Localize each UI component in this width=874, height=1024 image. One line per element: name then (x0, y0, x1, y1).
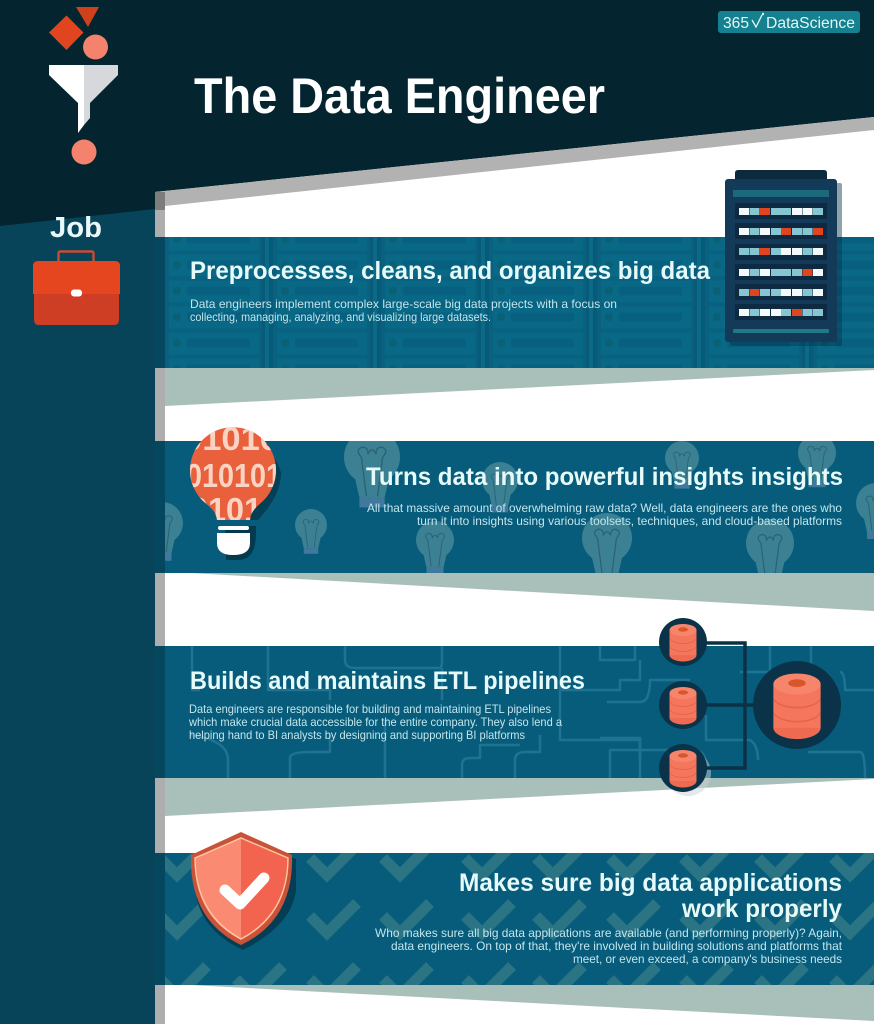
icon: briefcase (33, 252, 120, 325)
icon: light bulb (190, 427, 281, 560)
icon: shield (191, 832, 296, 950)
body: insights: turn it into insights using various toolsets, techniques, and cloud-based platforms (417, 514, 842, 528)
sidebar (0, 200, 155, 1024)
title: The Data Engineer (194, 68, 605, 124)
body: ETL: which make crucial data accessible for the entire company. They also lend a (188, 715, 562, 729)
body: ETL: Data engineers are responsible for building and maintaining ETL pipelines (189, 702, 551, 716)
band 4: check pattern (165, 853, 874, 985)
heading: applications (459, 869, 842, 923)
body: preprocess: Data engineers implement complex large-scale big data projects with a focus on (190, 297, 617, 311)
heading: insights: Turns data into powerful insights insights (366, 463, 843, 491)
band 1 lower sage wedge (165, 368, 874, 406)
heading: ETL: Builds and maintains ETL pipelines (190, 667, 585, 695)
body: preprocess (190, 297, 617, 324)
body: applications: data engineers. On top of that, they're involved in building solutions and platforms that (391, 939, 843, 953)
body: applications: Who makes sure all big data applications are available (and performing properly)? Again, (375, 926, 842, 940)
icon: funnel with shapes (49, 7, 118, 164)
heading: applications: work properly (681, 895, 842, 923)
panel: applications text (375, 869, 843, 966)
body: applications (375, 926, 843, 966)
band 3 lower sage wedge (165, 778, 874, 816)
band 2: bulb pattern (165, 441, 874, 573)
panel: insights text (366, 463, 843, 528)
header grey slanted strip (155, 117, 874, 206)
panel: preprocess text (190, 257, 711, 324)
body: insights (367, 501, 842, 528)
heading: applications: Makes sure big data applications (459, 869, 842, 897)
body: ETL: helping hand to BI analysts by designing and supporting BI platforms (189, 728, 525, 742)
body: preprocess: collecting, managing, analyzing, and visualizing large datasets. (190, 310, 491, 324)
icon: database network (659, 618, 841, 796)
body: ETL (188, 702, 562, 742)
band 2 lower sage wedge (165, 573, 874, 611)
sidebar heading: Job (50, 212, 102, 244)
icon: light bulb: 010101 (186, 457, 282, 494)
heading: preprocess: Preprocesses, cleans, and organizes big data (190, 257, 711, 285)
body: applications: meet, or even exceed, a company's business needs (573, 952, 842, 966)
band 4 lower sage wedge (165, 985, 874, 1021)
band 1: server pattern (165, 237, 874, 368)
logo badge (718, 11, 860, 33)
panel: ETL text (188, 667, 585, 742)
body: insights: All that massive amount of overwhelming raw data? Well, data engineers are the ones who (367, 501, 842, 515)
icon: light bulb: 01010 (183, 420, 279, 457)
band 3: circuit pattern (165, 646, 874, 778)
icon: light bulb: 01010 (190, 491, 280, 528)
logo badge: DataScience (766, 15, 855, 32)
logo badge: 365 (723, 15, 749, 32)
header dark panel (0, 0, 874, 226)
icon: server rack (725, 170, 842, 346)
left vertical strip (155, 192, 165, 1024)
